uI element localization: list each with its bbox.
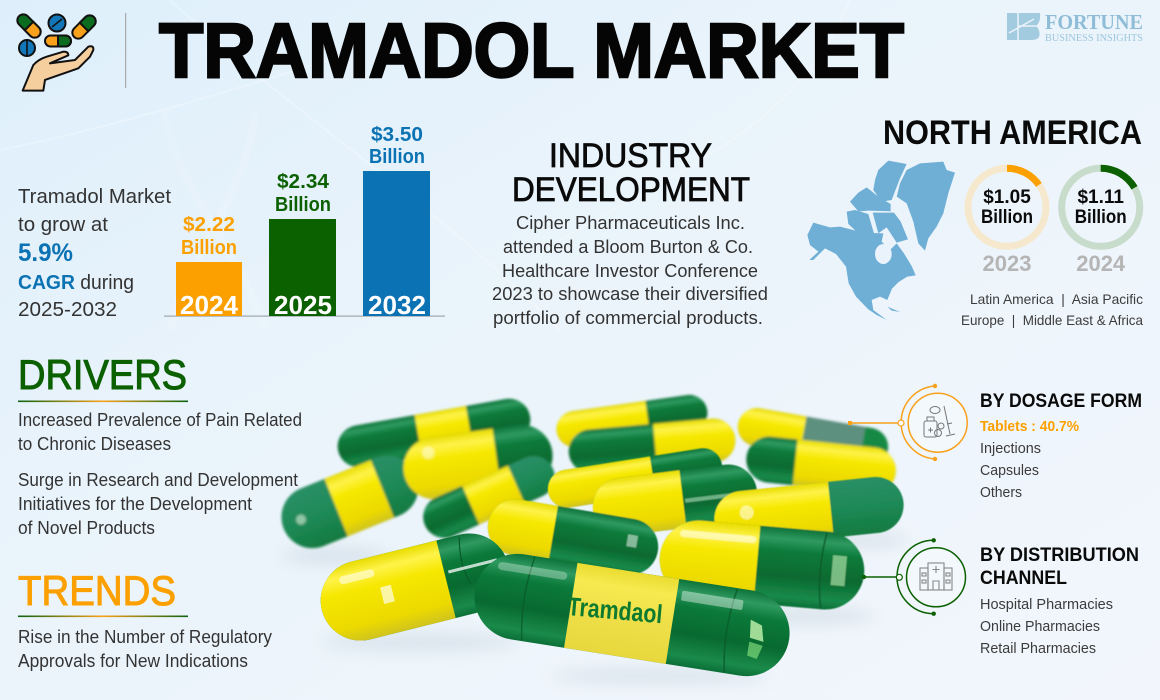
panel: industry development: portfolio of commercial products.	[493, 308, 763, 328]
panel: trends	[18, 567, 272, 671]
text: by dosage form: Capsules	[980, 462, 1039, 479]
logo: Fortune Business Insights	[1007, 10, 1143, 44]
icon: dosage form ring	[848, 384, 967, 461]
panel: drivers: DRIVERS	[18, 351, 187, 398]
title: TRAMADOL MARKET	[159, 8, 904, 94]
panel: drivers: Surge in Research and Development	[18, 470, 298, 490]
text: other regions: Europe | Middle East & Africa	[961, 312, 1143, 328]
donut: 2023: Billion	[981, 207, 1033, 228]
bar: 2024: Billion	[181, 237, 237, 259]
text: by dosage form	[980, 391, 1142, 501]
bar chart	[164, 124, 445, 320]
panel: drivers: to Chronic Diseases	[18, 434, 171, 454]
bar: 2032: $3.50	[371, 124, 423, 146]
text: by dosage form: Injections	[980, 440, 1041, 457]
donut: 2024: Billion	[1075, 207, 1127, 228]
bar: 2032: 2032	[368, 290, 426, 320]
bar: 2032: Billion	[369, 146, 425, 168]
panel: trends: Rise in the Number of Regulatory	[18, 627, 272, 647]
donut: 2023: $1.05	[983, 187, 1031, 208]
panel: industry development: DEVELOPMENT	[512, 171, 750, 209]
text: other regions	[961, 291, 1143, 328]
icon: distribution channel ring	[862, 538, 966, 616]
text: CAGR statement: Tramadol Market	[18, 186, 171, 208]
text: by distribution channel: Online Pharmacies	[980, 618, 1100, 635]
text: by dosage form: Tablets : 40.7%	[980, 418, 1079, 435]
panel: industry development: Cipher Pharmaceuticals Inc.	[516, 213, 745, 233]
capsule: main labelled	[468, 548, 796, 682]
donut: 2024: $1.11	[1077, 187, 1124, 208]
bar: 2024: 2024	[180, 290, 239, 320]
bar: 2024: $2.22	[183, 214, 235, 236]
bar: 2025: Billion	[275, 194, 331, 216]
capsules photo	[272, 393, 910, 683]
panel: trends: TRENDS	[18, 567, 176, 614]
donut: 2024: 2024	[1076, 251, 1126, 276]
panel: drivers	[18, 351, 302, 538]
text: by distribution channel	[980, 545, 1139, 657]
bar: 2032	[363, 124, 430, 320]
text: by distribution channel: BY DISTRIBUTION	[980, 545, 1139, 566]
panel: drivers: Increased Prevalence of Pain Related	[18, 410, 302, 430]
bar: 2025: 2025	[274, 290, 332, 320]
text: by distribution channel: Hospital Pharmacies	[980, 596, 1113, 613]
bar: 2025: $2.34	[277, 171, 330, 193]
bar: 2024	[176, 214, 242, 320]
panel: industry development	[492, 137, 768, 328]
text: by distribution channel: Retail Pharmacies	[980, 640, 1096, 657]
donut: 2023	[968, 168, 1046, 276]
logo: Fortune Business Insights: BUSINESS INSIGHTS	[1045, 33, 1143, 44]
text: CAGR statement: to grow at	[18, 214, 108, 236]
panel: industry development: INDUSTRY	[549, 137, 712, 175]
capsule label: Tramdaol	[566, 591, 664, 629]
panel: industry development: Healthcare Investor Conference	[502, 261, 758, 281]
text: by dosage form: BY DOSAGE FORM	[980, 391, 1142, 412]
text: CAGR statement: CAGR during	[18, 272, 134, 294]
logo: Fortune Business Insights: FORTUNE	[1045, 10, 1143, 34]
panel: drivers: of Novel Products	[18, 518, 155, 538]
text: by dosage form: Others	[980, 484, 1022, 501]
text: CAGR statement: 2025-2032	[18, 299, 117, 321]
text: other regions: Latin America | Asia Pacific	[970, 291, 1143, 307]
icon: hand with pills	[15, 12, 98, 91]
text: by distribution channel: CHANNEL	[980, 568, 1067, 589]
panel: drivers: Initiatives for the Development	[18, 494, 252, 514]
map: north america	[807, 161, 955, 322]
panel: industry development: attended a Bloom Burton & Co.	[503, 237, 753, 257]
text: CAGR statement	[18, 186, 171, 321]
panel: trends: Approvals for New Indications	[18, 651, 248, 671]
bar: 2025	[269, 171, 336, 320]
panel: industry development: 2023 to showcase their diversified	[492, 284, 768, 304]
donut: 2023: 2023	[983, 251, 1031, 276]
donut: 2024	[1062, 168, 1140, 276]
text: CAGR statement: 5.9%	[18, 239, 73, 267]
